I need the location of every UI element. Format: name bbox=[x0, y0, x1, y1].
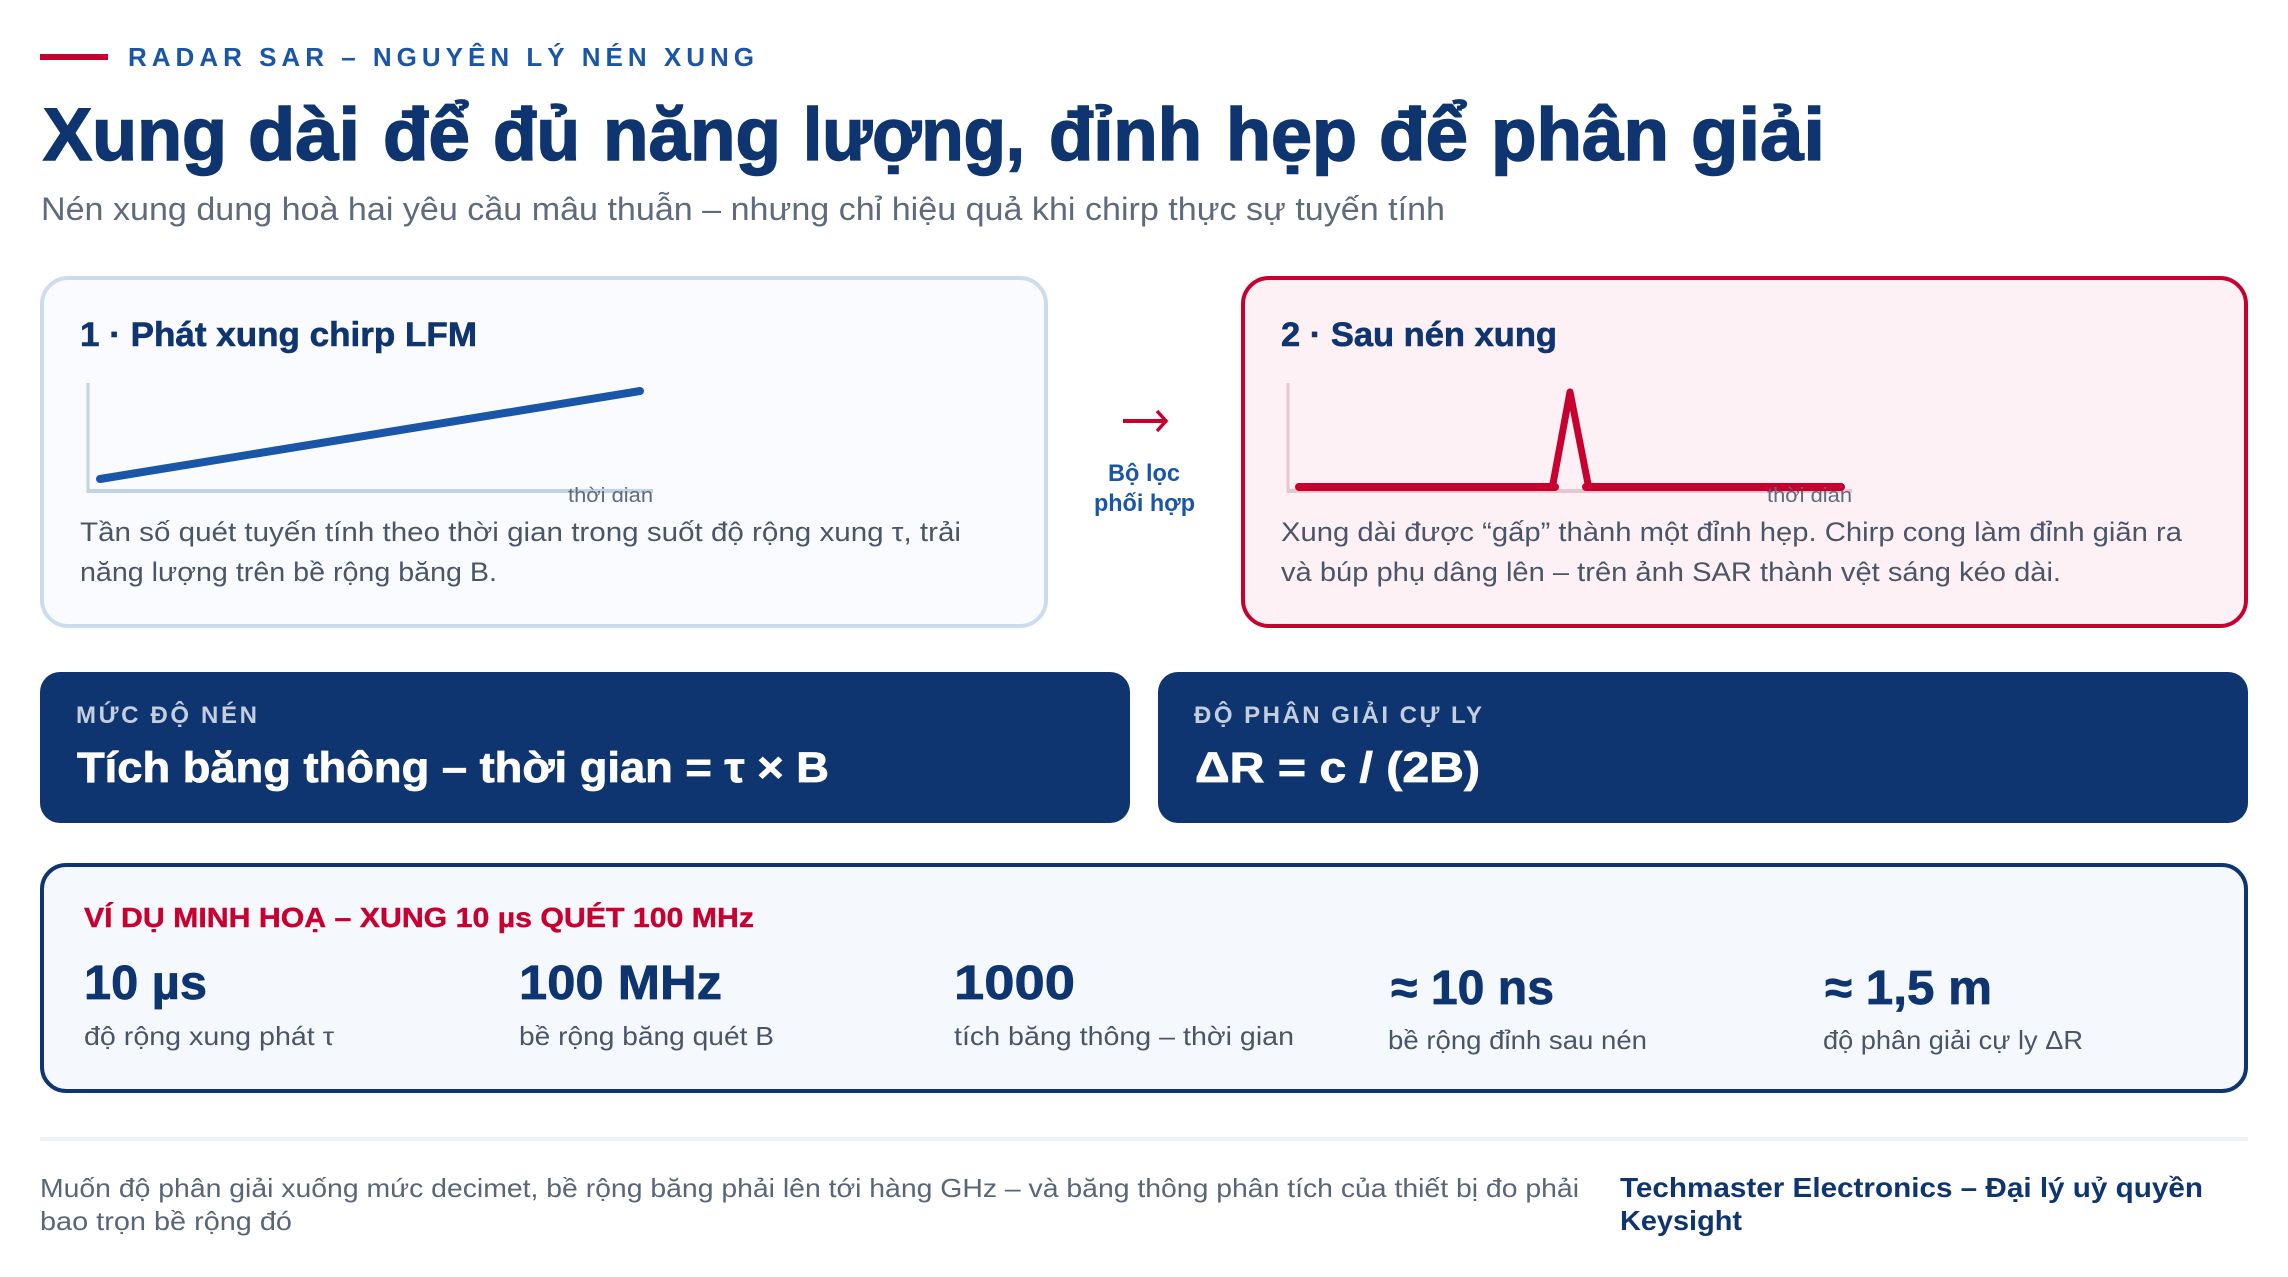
title: để bbox=[1379, 93, 1468, 176]
title: Xung bbox=[43, 93, 227, 176]
formula card: range resolution: ĐỘ PHÂN GIẢI CỰ LY bbox=[1194, 700, 1482, 729]
chart: compressed peak: thời gian bbox=[1767, 485, 1852, 507]
chart: compressed peak bbox=[1286, 383, 1852, 507]
arrow label: phối hợp bbox=[1094, 490, 1195, 517]
stat: time-bandwidth product: 1000 bbox=[954, 957, 1075, 1010]
footer note bbox=[40, 1173, 1579, 1236]
stat: bandwidth: bề rộng băng quét B bbox=[519, 1021, 774, 1051]
stat: compressed peak width: ≈ 10 ns bbox=[1391, 962, 1554, 1015]
title bbox=[43, 93, 1825, 176]
stat: compressed peak width bbox=[1388, 962, 1647, 1055]
formula card: range resolution bbox=[1158, 672, 2248, 823]
eyebrow: RADAR SAR – NGUYÊN LÝ NÉN XUNG bbox=[128, 42, 754, 72]
formula card: compression: Tích băng thông – thời gian = τ × B bbox=[77, 744, 829, 792]
stat: range resolution: độ phân giải cự ly ΔR bbox=[1823, 1025, 2083, 1055]
panel text: chirp description bbox=[80, 517, 961, 587]
stat: pulse width bbox=[84, 957, 335, 1051]
title: phân bbox=[1491, 93, 1669, 176]
panel text: chirp description: Tần số quét tuyến tính theo thời gian trong suốt độ rộng xung τ, trải bbox=[80, 517, 961, 547]
example heading: VÍ DỤ MINH HOẠ – XUNG 10 µs QUÉT 100 MHz bbox=[84, 902, 754, 933]
footer note: Muốn độ phân giải xuống mức decimet, bề rộng băng phải lên tới hàng GHz – và băng thông phân tích của thiết bị đo phải bbox=[40, 1173, 1579, 1203]
panel: worked example bbox=[42, 865, 2246, 1091]
footer brand bbox=[1620, 1172, 2203, 1236]
title: lượng, bbox=[803, 93, 1025, 176]
stat: time-bandwidth product bbox=[954, 957, 1294, 1051]
panel: chirp pulse bbox=[42, 278, 1046, 626]
formula card: compression bbox=[40, 672, 1130, 823]
title: dài bbox=[248, 93, 360, 176]
footer brand: Techmaster Electronics – Đại lý uỷ quyền bbox=[1620, 1172, 2203, 1203]
title: để bbox=[383, 93, 470, 176]
stat: range resolution: ≈ 1,5 m bbox=[1825, 962, 1992, 1015]
title: đỉnh bbox=[1049, 93, 1202, 176]
arrow label: Bộ lọc bbox=[1108, 460, 1180, 487]
stat: range resolution bbox=[1823, 962, 2083, 1055]
title: hẹp bbox=[1226, 93, 1357, 176]
stat: pulse width: độ rộng xung phát τ bbox=[84, 1021, 335, 1051]
title: năng bbox=[603, 93, 781, 176]
arrow label bbox=[1094, 460, 1195, 517]
footer note: bao trọn bề rộng đó bbox=[40, 1206, 292, 1236]
stat: bandwidth: 100 MHz bbox=[519, 957, 722, 1010]
title: đủ bbox=[493, 93, 580, 176]
subtitle: Nén xung dung hoà hai yêu cầu mâu thuẫn – nhưng chỉ hiệu quả khi chirp thực sự tuyến tính bbox=[41, 191, 1445, 227]
stat: compressed peak width: bề rộng đỉnh sau nén bbox=[1388, 1025, 1647, 1055]
chart: linear frequency sweep: thời gian bbox=[568, 485, 653, 507]
panel text: compression description: Xung dài được “gấp” thành một đỉnh hẹp. Chirp cong làm đỉnh giãn ra bbox=[1281, 517, 2183, 547]
panel text: compression description: và búp phụ dâng lên – trên ảnh SAR thành vệt sáng kéo dài. bbox=[1281, 557, 2061, 587]
formula card: compression: MỨC ĐỘ NÉN bbox=[76, 701, 257, 729]
panel text: compression description bbox=[1281, 517, 2183, 587]
panel text: chirp description: năng lượng trên bề rộng băng B. bbox=[80, 557, 497, 587]
title: giải bbox=[1691, 93, 1825, 176]
panel: after compression bbox=[1243, 278, 2246, 626]
panel heading: after compression: 2 · Sau nén xung bbox=[1281, 316, 1557, 354]
stat: pulse width: 10 µs bbox=[84, 957, 207, 1010]
stat: bandwidth bbox=[519, 957, 774, 1051]
stat: time-bandwidth product: tích băng thông – thời gian bbox=[954, 1021, 1294, 1051]
formula card: range resolution: ΔR = c / (2B) bbox=[1195, 744, 1480, 792]
chart: linear frequency sweep bbox=[86, 383, 653, 507]
arrow: matched filter bbox=[1123, 411, 1166, 431]
panel heading: chirp: 1 · Phát xung chirp LFM bbox=[80, 316, 477, 354]
footer brand: Keysight bbox=[1620, 1205, 1742, 1236]
